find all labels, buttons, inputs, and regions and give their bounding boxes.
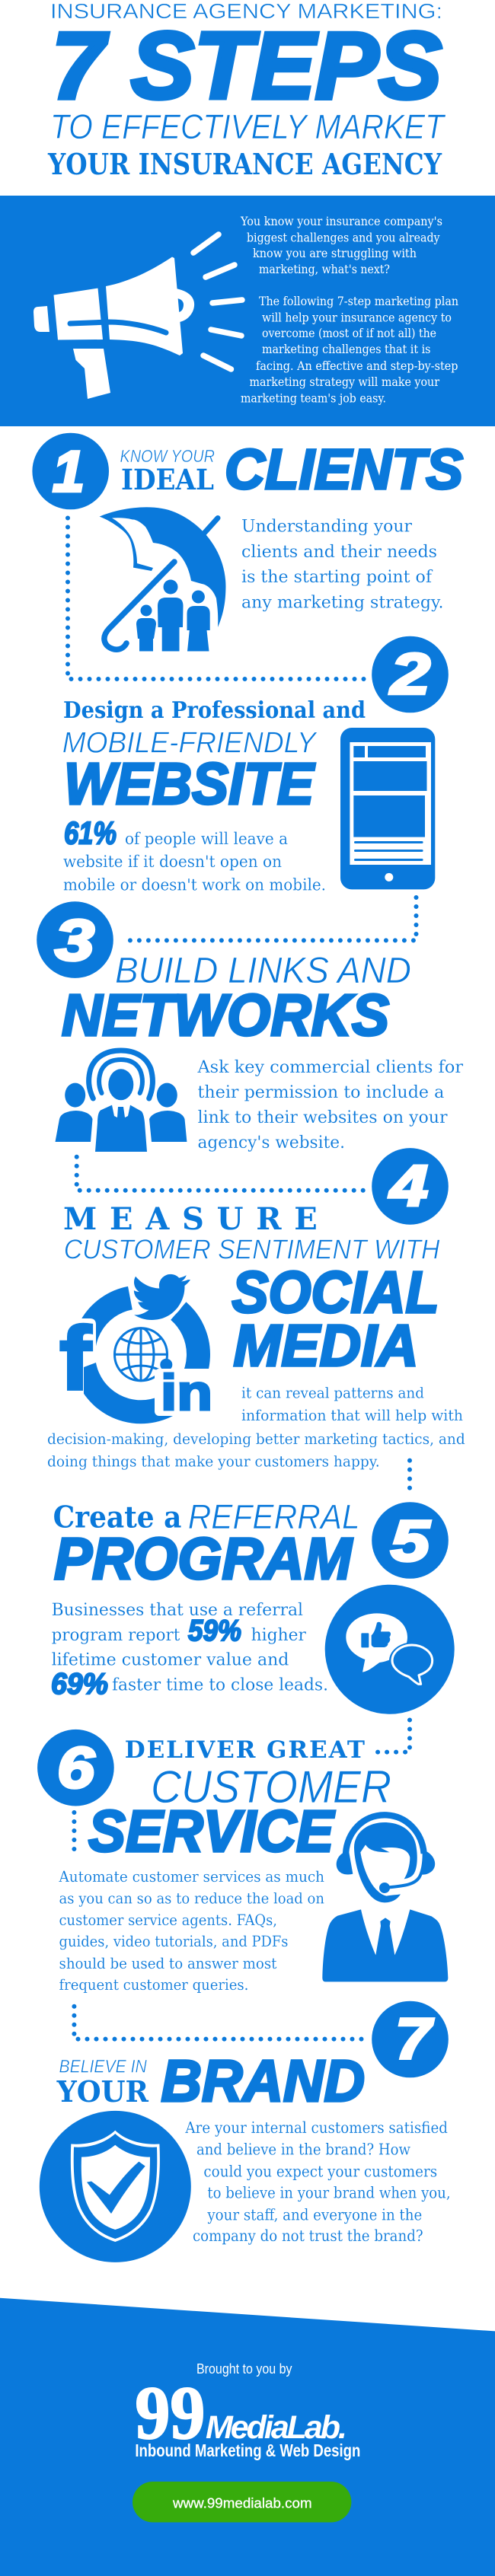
text block: step 5: higher: [251, 1626, 306, 1645]
icon: umbrella and family: [100, 507, 225, 652]
step 2 heading: WEBSITE: [64, 751, 315, 817]
text block: introduction: biggest challenges and you already: [247, 230, 440, 245]
step 5 heading: REFERRAL: [188, 1497, 360, 1536]
title: 7 STEPS: [52, 14, 442, 119]
text block: step 6: Automate customer services as much: [59, 1867, 324, 1886]
text block: step 5: 69%: [51, 1668, 108, 1701]
arrow: dotted connector 5 to 6: [372, 1720, 410, 1752]
text block: step 3: their permission to include a: [198, 1083, 444, 1102]
step 4 heading: MEASURE: [63, 1201, 318, 1237]
step 7 badge: [372, 2001, 449, 2077]
text block: introduction: marketing challenges that it is: [262, 342, 431, 356]
text: brought to you by: Brought to you by: [196, 2361, 292, 2377]
text block: step 6: customer service agents. FAQs,: [59, 1911, 277, 1929]
logo: 99MediaLab: 99: [135, 2370, 205, 2455]
arrow: dotted connector 6 to 7: [74, 2007, 366, 2039]
text block: introduction: The following 7-step marketing plan: [259, 294, 458, 308]
text block: step 6: guides, video tutorials, and PDFs: [59, 1932, 288, 1950]
text block: step 5: program report: [52, 1626, 180, 1645]
step 7 heading: BRAND: [161, 2048, 365, 2114]
text block: step 5: 59%: [188, 1615, 241, 1647]
text block: step 5: lifetime customer value and: [52, 1651, 289, 1670]
step 1 badge: [32, 433, 109, 509]
text block: step 4: information that will help with: [241, 1407, 463, 1424]
icon: halo behind linkedin in: [155, 1369, 219, 1416]
arrow: dotted connector 6 down: [72, 1812, 76, 1856]
text block: step 5: [51, 1601, 328, 1701]
text block: step 4: [47, 1384, 465, 1471]
step 7 badge: 7: [395, 2007, 434, 2072]
text block: step 3: link to their websites on your: [198, 1108, 448, 1127]
text block: introduction: overcome (most of if not all) the: [262, 326, 436, 340]
step 6 heading: [88, 1736, 391, 1864]
step 1 heading: IDEAL: [121, 463, 214, 496]
step 5 heading: [53, 1497, 360, 1592]
step 3 badge: [37, 901, 113, 978]
text block: step 7: to believe in your brand when you,: [207, 2183, 451, 2201]
text block: step 4: decision-making, developing better marketing tactics, and: [47, 1430, 465, 1448]
text block: step 2 statistic: mobile or doesn't work on mobile.: [63, 875, 326, 894]
text block: introduction: You know your insurance company's: [240, 214, 442, 228]
step 7 heading: [56, 2048, 365, 2114]
text block: step 2 statistic: of people will leave a: [125, 830, 288, 848]
step 2 heading: [62, 697, 366, 817]
logo: 99MediaLab: [135, 2370, 360, 2460]
icon: customer service agent: [322, 1815, 448, 1981]
text block: step 6: should be used to answer most: [59, 1954, 277, 1972]
arrow: dotted connector 2 to 3: [123, 897, 416, 940]
text block: step 3: agency's website.: [198, 1133, 345, 1153]
step 2 heading: MOBILE-FRIENDLY: [62, 727, 318, 760]
step 5 badge: 5: [391, 1509, 431, 1574]
text block: step 5: faster time to close leads.: [112, 1676, 328, 1694]
text block: step 5: Businesses that use a referral: [52, 1601, 303, 1620]
step 5 heading: PROGRAM: [54, 1526, 353, 1592]
text block: step 3: [196, 1058, 463, 1153]
arrow: dotted connector 1 to 2: [68, 518, 364, 679]
logo: 99MediaLab: Inbound Marketing & Web Design: [135, 2441, 360, 2460]
text block: step 7: could you expect your customers: [203, 2162, 437, 2180]
step 1 heading: CLIENTS: [225, 438, 463, 501]
text block: introduction: marketing, what's next?: [259, 262, 390, 276]
text block: step 6: as you can so as to reduce the load on: [59, 1889, 324, 1908]
icon: halo behind facebook f: [53, 1318, 96, 1395]
step 6 heading: SERVICE: [88, 1799, 336, 1864]
title: [47, 0, 446, 181]
text block: introduction: [240, 214, 458, 405]
text block: introduction: facing. An effective and step-by-step: [256, 359, 458, 373]
step 5 badge: [372, 1502, 449, 1579]
text block: step 7: Are your internal customers satisfied: [185, 2119, 448, 2137]
step 4 badge: [372, 1148, 449, 1225]
icon: linkedin in: in: [161, 1364, 212, 1420]
step 5 heading: Create a: [53, 1500, 181, 1535]
icon: facebook f: f: [59, 1309, 92, 1409]
panel: footer: [0, 2298, 495, 2576]
step 4 badge: 4: [388, 1154, 428, 1218]
text block: step 1: clients and their needs: [241, 543, 437, 562]
step 1 badge: 1: [53, 440, 85, 504]
text block: step 7: and believe in the brand? How: [196, 2140, 410, 2158]
logo: 99MediaLab: MediaLab.: [206, 2409, 347, 2446]
step 4 heading: SOCIAL: [232, 1260, 439, 1325]
text block: introduction: marketing team's job easy.: [241, 391, 386, 405]
step 6 badge: 6: [57, 1736, 95, 1801]
text block: step 2 statistic: website if it doesn't open on: [63, 853, 282, 871]
step 2 badge: [372, 636, 449, 713]
text block: step 6: [59, 1867, 324, 1994]
text block: step 6: frequent customer queries.: [59, 1975, 248, 1994]
step 3 badge: 3: [55, 909, 94, 973]
text block: step 1: Understanding your: [241, 518, 412, 536]
panel: introduction: [0, 196, 495, 426]
text block: introduction: marketing strategy will make your: [250, 375, 439, 389]
text block: step 7: your staff, and everyone in the: [207, 2205, 422, 2224]
step 7 heading: BELIEVE IN: [59, 2057, 147, 2077]
step 3 heading: BUILD LINKS AND: [115, 951, 411, 991]
step 4 heading: CUSTOMER SENTIMENT WITH: [64, 1234, 440, 1265]
step 2 heading: Design a Professional and: [63, 697, 366, 724]
step 6 badge: [37, 1730, 114, 1806]
text block: step 7: company do not trust the brand?: [193, 2227, 423, 2245]
step 1 heading: [120, 438, 463, 501]
button: website link: www.99medialab.com: [172, 2495, 312, 2511]
icon: feedback speech bubbles: [325, 1585, 455, 1714]
text block: introduction: know you are struggling with: [253, 246, 417, 260]
text block: step 4: doing things that make your customers happy.: [47, 1453, 380, 1471]
icon: megaphone: [34, 234, 242, 399]
title: YOUR INSURANCE AGENCY: [47, 147, 442, 181]
arrow: dotted connector 4 to 5: [407, 1461, 412, 1494]
step 4 heading: [63, 1201, 440, 1379]
icon: shield with check mark: [40, 2111, 191, 2262]
text block: step 2 statistic: [63, 815, 326, 894]
icon: globe: [114, 1328, 168, 1381]
icon: mobile phone: [340, 728, 435, 889]
text block: step 1: is the starting point of: [241, 568, 433, 587]
icon: twitter bird: [134, 1274, 190, 1320]
icon: networking people: [55, 1050, 187, 1152]
text block: step 3: Ask key commercial clients for: [196, 1058, 463, 1077]
text block: step 7: [185, 2119, 451, 2245]
step 7 heading: YOUR: [56, 2074, 148, 2109]
step 2 badge: 2: [389, 642, 430, 706]
step 6 heading: DELIVER GREAT: [125, 1736, 365, 1764]
text block: step 1: [241, 518, 443, 612]
text block: step 2 statistic: 61%: [64, 815, 117, 851]
title: TO EFFECTIVELY MARKET: [50, 107, 446, 146]
icon: social media ring: [53, 1274, 219, 1420]
step 6 heading: CUSTOMER: [151, 1761, 391, 1812]
text block: introduction: will help your insurance agency to: [262, 311, 452, 324]
step 3 heading: [62, 951, 411, 1048]
text block: step 4: it can reveal patterns and: [241, 1384, 424, 1401]
step 3 heading: NETWORKS: [62, 983, 389, 1048]
text block: step 1: any marketing strategy.: [241, 594, 443, 612]
step 4 heading: MEDIA: [233, 1313, 419, 1379]
button: website link: [133, 2482, 351, 2523]
arrow: dotted connector 3 to 4: [77, 1157, 368, 1191]
step 1 heading: KNOW YOUR: [120, 446, 215, 466]
